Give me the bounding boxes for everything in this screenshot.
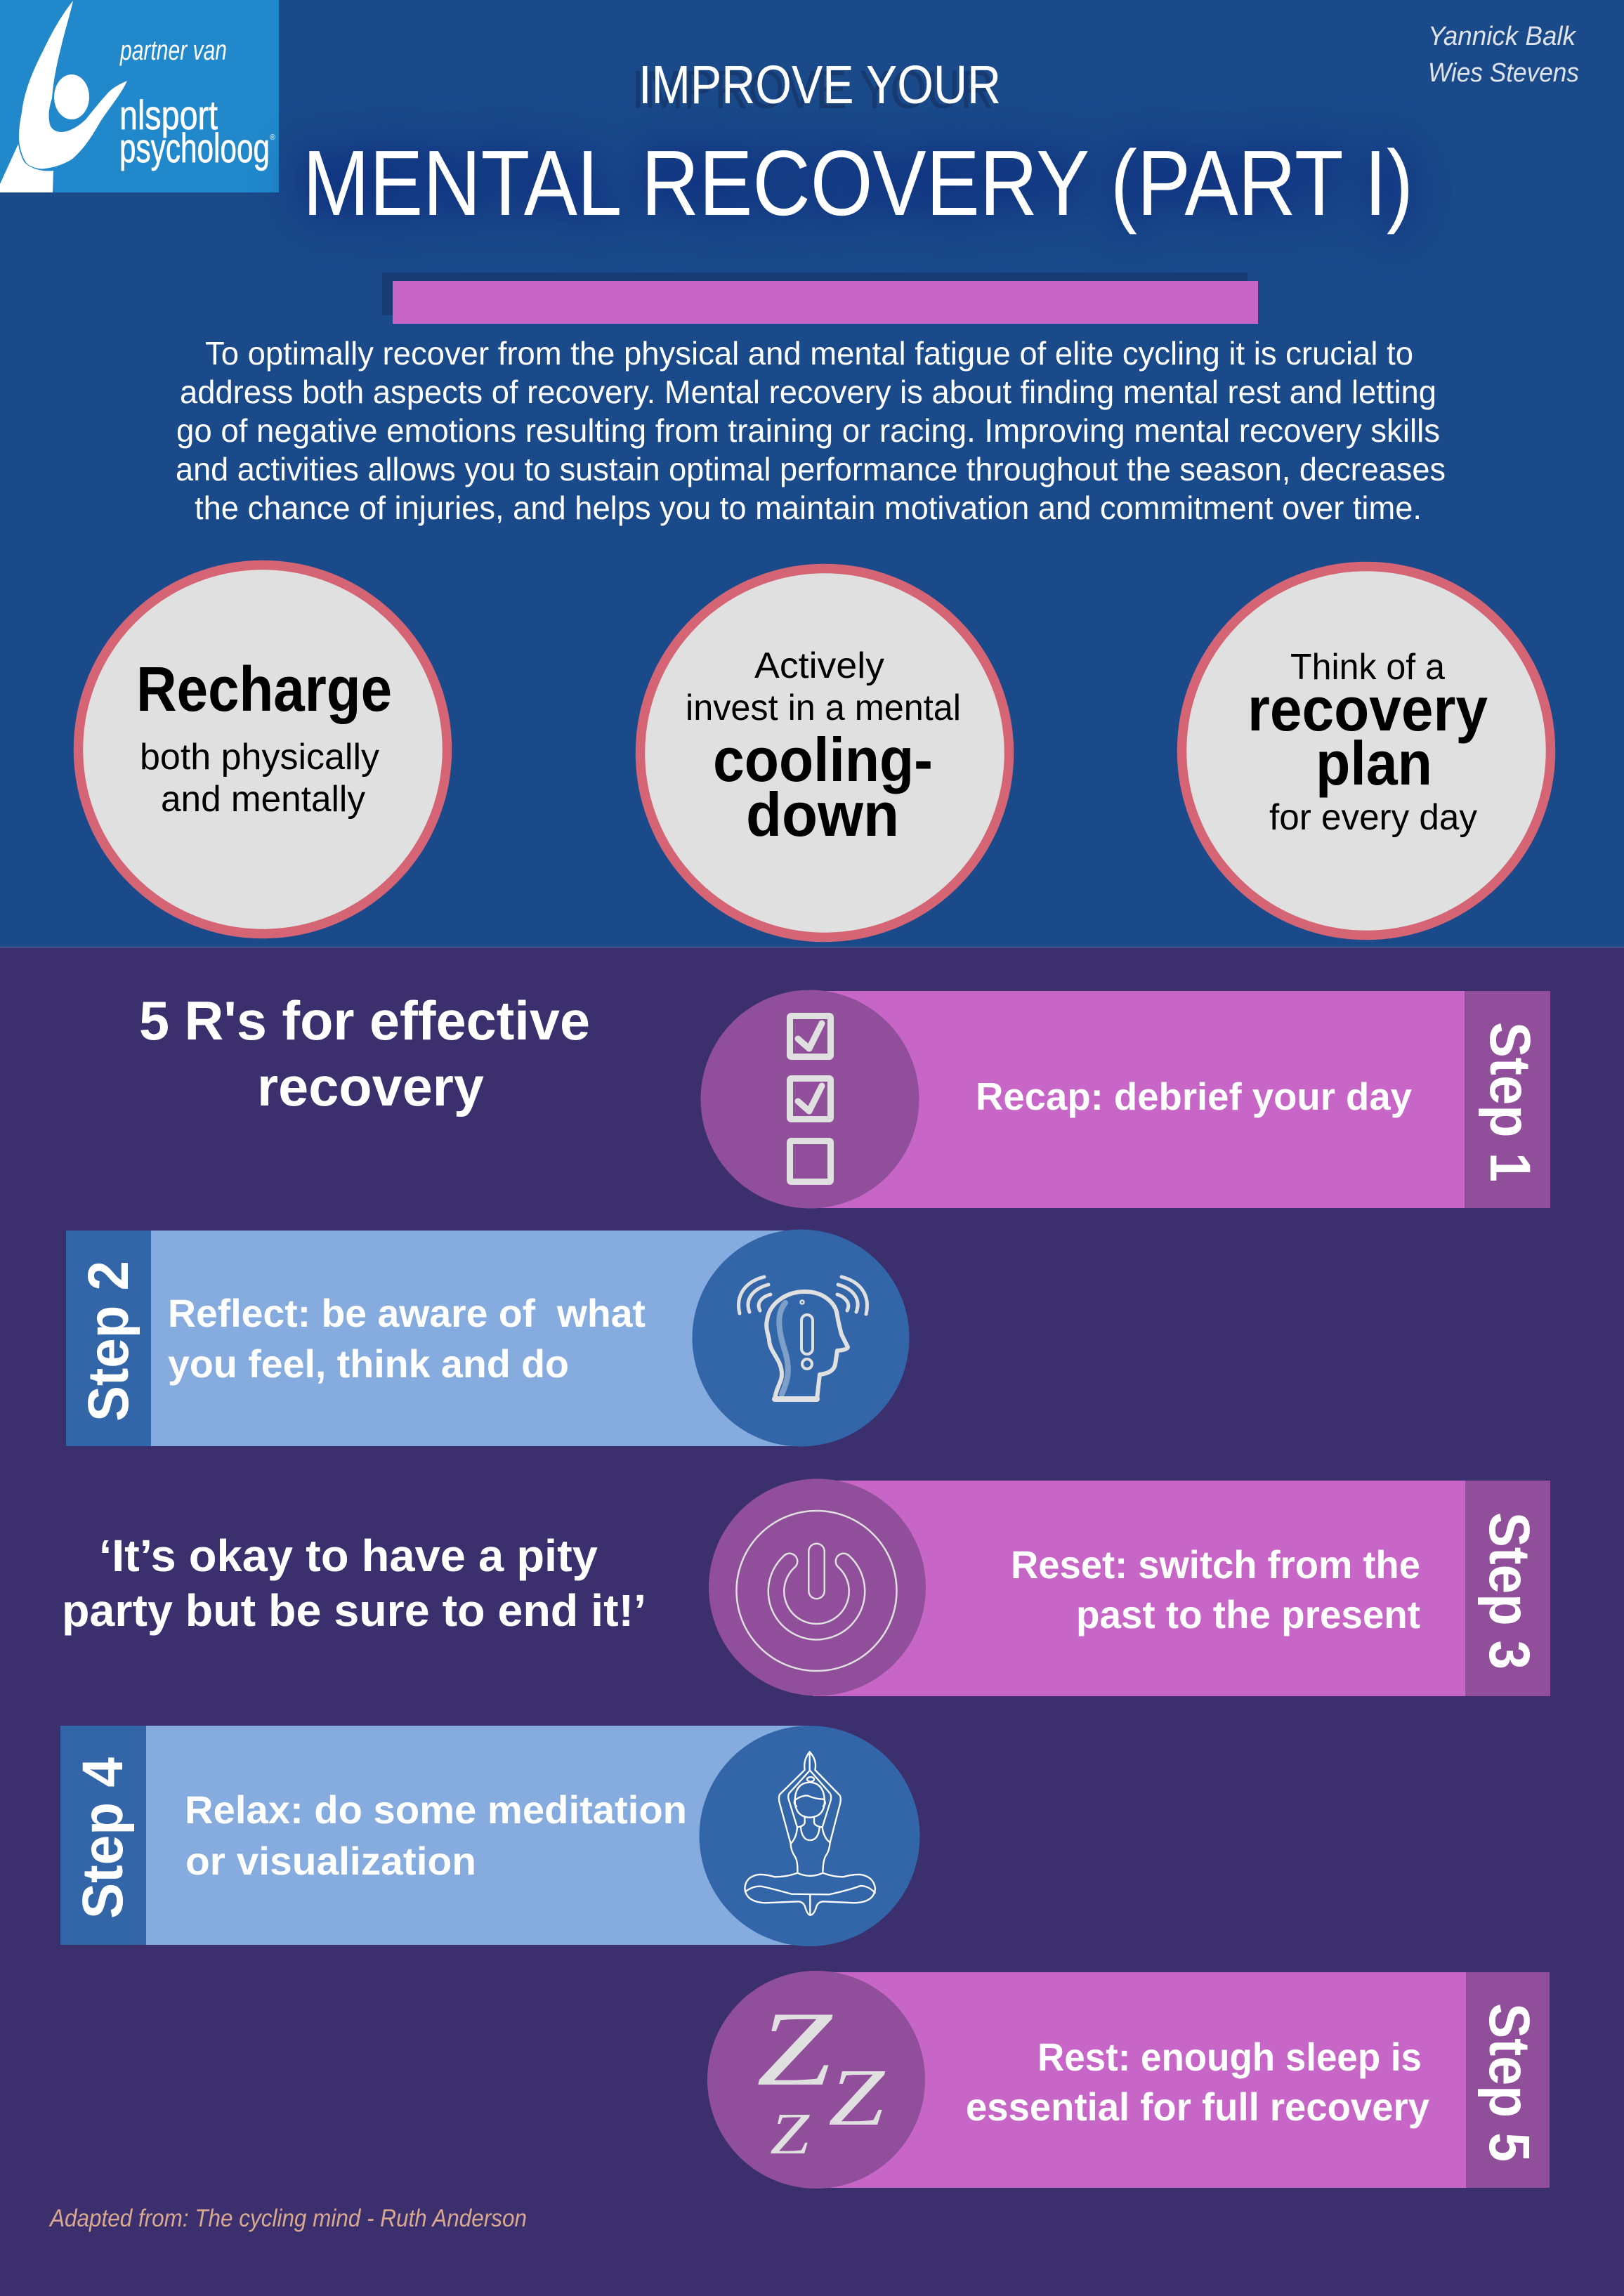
circle: cooling-down: Actively <box>754 645 884 686</box>
step 3: Step 3 <box>1477 1512 1541 1669</box>
circle: cooling-down: invest in a mental <box>686 688 961 728</box>
intro paragraph: and activities allows you to sustain optimal performance throughout the season, decreases <box>176 451 1446 487</box>
step 4 <box>60 1726 920 1946</box>
step 3: Reset: switch from the <box>1011 1542 1420 1587</box>
circle: recovery plan <box>1181 566 1551 936</box>
source credit: Adapted from: The cycling mind - Ruth Anderson <box>48 2205 527 2232</box>
intro paragraph: To optimally recover from the physical and mental fatigue of elite cycling it is crucial to <box>205 335 1413 372</box>
step 1: Step 1 <box>1478 1022 1542 1182</box>
step 4: or visualization <box>185 1839 476 1883</box>
step 1 <box>701 990 1550 1208</box>
circle: recovery plan: recovery <box>1248 674 1488 744</box>
icon: power button <box>736 1511 896 1671</box>
title: improve your: IMPROVE YOUR <box>639 55 1001 115</box>
circle: recovery plan: Think of a <box>1290 647 1445 688</box>
step 5: Step 5 <box>1477 2003 1541 2162</box>
step 2 <box>66 1229 909 1447</box>
step 5: Rest: enough sleep is <box>1037 2035 1422 2079</box>
step 2: Reflect: be aware of what <box>168 1291 646 1335</box>
heading: 5 R's <box>139 990 590 1117</box>
panel: steps background <box>0 947 1624 2296</box>
intro paragraph: go of negative emotions resulting from training or racing. Improving mental recovery skills <box>176 412 1440 449</box>
step 2: you feel, think and do <box>168 1341 569 1386</box>
circle: cooling-down: down <box>746 780 899 849</box>
authors: Yannick Balk <box>1428 22 1577 51</box>
logo: nlsport psycholoog: partner van <box>119 35 227 66</box>
authors: Wies Stevens <box>1428 58 1579 88</box>
circle: recharge: Recharge <box>136 655 392 725</box>
authors <box>1428 22 1579 88</box>
circle: recharge <box>79 565 447 934</box>
circle: cooling-down: cooling- <box>713 725 933 794</box>
quote <box>62 1530 646 1636</box>
intro paragraph <box>176 335 1446 526</box>
step 3: past to the present <box>1076 1592 1420 1636</box>
step 5 <box>707 1971 1550 2189</box>
step 2: Step 2 <box>77 1261 140 1422</box>
circle: recovery plan: plan <box>1316 728 1432 798</box>
icon: sleeping Z letters: Z <box>828 2053 886 2143</box>
quote: party but be sure to end it!’ <box>62 1585 646 1636</box>
icon: head with exclamation <box>739 1277 867 1399</box>
heading: 5 R's: recovery <box>257 1056 484 1117</box>
circle: recovery plan: for every day <box>1269 797 1477 838</box>
logo: nlsport psycholoog: psycholoog <box>119 126 270 171</box>
panel: header background <box>0 0 1624 947</box>
logo: nlsport psycholoog: nlsport <box>119 93 218 138</box>
quote: ‘It’s okay to have a pity <box>99 1530 598 1581</box>
logo: nlsport psycholoog: ® <box>270 133 275 142</box>
circle: recharge: both physically <box>140 737 379 778</box>
intro paragraph: the chance of injuries, and helps you to maintain motivation and commitment over time. <box>195 490 1422 526</box>
step 4: Step 4 <box>71 1757 135 1919</box>
title: mental recovery: MENTAL RECOVERY (PART I) <box>303 131 1413 235</box>
icon: sleeping Z letters: Z <box>757 1990 833 2108</box>
icon: meditation figure <box>745 1752 875 1915</box>
step 5: essential for full recovery <box>966 2085 1429 2129</box>
intro paragraph: address both aspects of recovery. Mental recovery is about finding mental rest and letting <box>180 374 1436 410</box>
title underline bar <box>382 273 1258 324</box>
heading: 5 R's: 5 R's for effective <box>139 990 590 1051</box>
icon: checklist <box>790 1016 830 1181</box>
logo: nlsport psycholoog <box>0 0 279 192</box>
step 4: Relax: do some meditation <box>185 1787 687 1832</box>
circle: cooling-down <box>641 569 1009 937</box>
circle: recharge: and mentally <box>161 779 365 820</box>
step 3 <box>709 1479 1550 1696</box>
icon: sleeping Z letters <box>757 1990 886 2167</box>
icon: sleeping Z letters: Z <box>770 2101 811 2167</box>
step 1: Recap: debrief your day <box>976 1075 1412 1118</box>
